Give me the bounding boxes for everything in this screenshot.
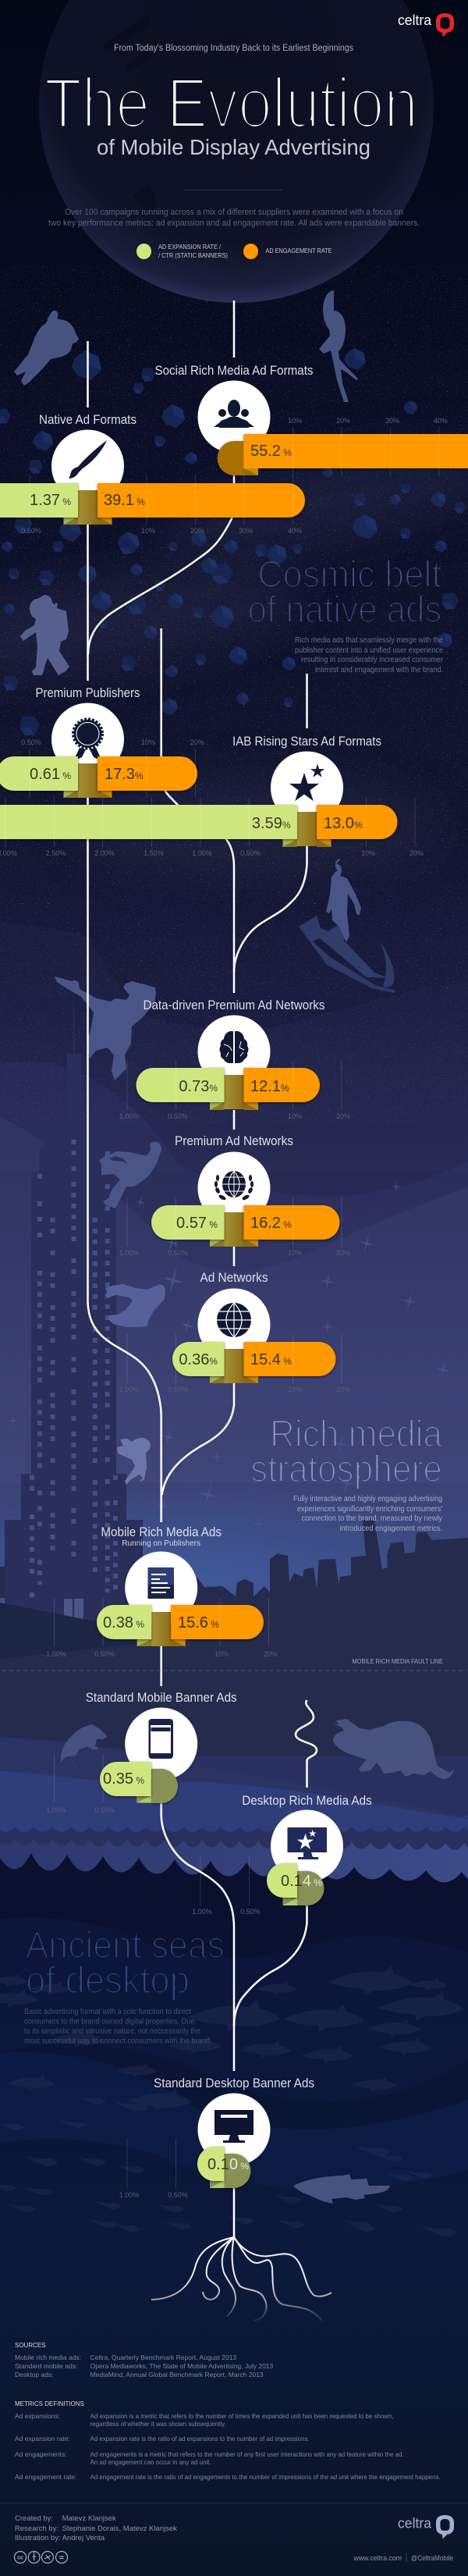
wave bands	[0, 1737, 468, 1884]
badge: Social Rich Media Ad Formats: 20%	[336, 417, 350, 425]
badge: Social Rich Media Ad Formats: Social Rich Media Ad Formats	[154, 364, 314, 378]
legend: AD EXPANSION RATE /	[158, 244, 222, 251]
badge: Mobile Rich Media Ads: 1.00%	[46, 1650, 66, 1658]
section: rich media stratosphere: experiences significantly enriching consumers'	[297, 1504, 442, 1514]
badge: Ad Networks: 15.4 %	[250, 1351, 292, 1368]
badge: Standard Mobile Banner Ads: Standard Mobile Banner Ads	[86, 1691, 237, 1705]
badge: Premium Ad Networks: 0.50%	[168, 1249, 188, 1257]
licence icons: cc	[17, 2556, 23, 2560]
section: rich media stratosphere: introduced engagement metrics.	[340, 1524, 442, 1533]
icon: globe	[217, 1303, 251, 1337]
credits: Created by:	[15, 2514, 53, 2523]
icon: monitor with banner	[214, 2110, 254, 2143]
section: cosmic belt of native ads: resulting in considerably increased consumer	[301, 655, 443, 664]
illustration: skyscraper	[5, 966, 143, 1641]
badge: Ad Networks	[119, 1271, 350, 1393]
illustration: flying astronaut	[14, 311, 79, 386]
icon: users	[214, 400, 254, 428]
badge: IAB Rising Stars Ad Formats: 2.50%	[46, 849, 66, 857]
badge: IAB Rising Stars Ad Formats: 10%	[361, 849, 375, 857]
badge: Standard Mobile Banner Ads	[46, 1691, 237, 1814]
metrics definitions: Ad engagement rate is the ratio of ad engagements to the number of impressions of the ad unit where the engagement happens.	[90, 2473, 441, 2481]
section: ancient seas of desktop: Ancient seas	[25, 1925, 225, 1966]
badge: Data-driven Premium Ad Networks: 20%	[336, 1112, 350, 1120]
badge: Ad Networks: 20%	[336, 1386, 350, 1393]
icon: brain	[220, 1031, 248, 1063]
badge: Standard Desktop Banner Ads	[119, 2076, 314, 2199]
sources: Standard mobile ads:	[15, 2362, 77, 2370]
badge: Native Ad Formats: 1.37 %	[30, 492, 71, 509]
title: The Evolution	[44, 65, 418, 143]
illustration: rat	[61, 1724, 108, 1772]
badge: IAB Rising Stars Ad Formats	[0, 735, 424, 857]
logo: celtra	[398, 12, 454, 37]
badge: Standard Mobile Banner Ads: 0.35 %	[103, 1770, 144, 1788]
badge: Standard Desktop Banner Ads: 1.00%	[119, 2191, 139, 2199]
badge: Premium Ad Networks: 0.57 %	[176, 1215, 218, 1232]
badge: Native Ad Formats: 30%	[239, 527, 253, 535]
trunk lines	[87, 301, 317, 2237]
section: ancient seas of desktop: to its simplistic and intrusive nature, not neccessarily the	[24, 2026, 200, 2036]
section: rich media stratosphere: Rich media	[270, 1414, 442, 1455]
foreground hill	[0, 1603, 179, 1659]
legend	[136, 244, 332, 259]
credits	[15, 2514, 177, 2542]
icon: stars	[289, 763, 324, 801]
section: cosmic belt of native ads: interest and engagement with the brand.	[315, 665, 443, 674]
illustration: triceratops	[333, 1719, 454, 1779]
logo: celtra: celtra	[398, 12, 432, 28]
section: ancient seas of desktop: consumers to the brand owned digital properties. Due	[24, 2017, 195, 2026]
sources	[15, 2342, 274, 2379]
badge: Native Ad Formats: 40%	[288, 527, 302, 535]
legend: AD ENGAGEMENT RATE	[265, 247, 332, 254]
metrics definitions: Ad expansion rate is the ratio of ad expansions to the number of ad impressions.	[90, 2435, 310, 2443]
icon: rosette	[73, 719, 103, 761]
badge: Mobile Rich Media Ads: 10%	[214, 1650, 229, 1658]
icon: document	[148, 1567, 174, 1599]
badge: Data-driven Premium Ad Networks: 12.1%	[250, 1078, 289, 1095]
badge: Native Ad Formats: 10%	[141, 527, 155, 535]
licence icons	[14, 2551, 67, 2564]
badge: Standard Desktop Banner Ads: Standard Desktop Banner Ads	[154, 2076, 314, 2090]
section: rich media stratosphere: stratosphere	[250, 1449, 442, 1490]
page background	[0, 0, 468, 1686]
badge: Standard Desktop Banner Ads: 0.10 %	[207, 2156, 249, 2173]
shoal of fish	[0, 1966, 464, 2236]
badge: Ad Networks: 10%	[288, 1386, 302, 1393]
badge: Premium Ad Networks: 16.2 %	[250, 1215, 292, 1232]
badge: Desktop Rich Media Ads: 0.50%	[240, 1908, 261, 1916]
badge: Data-driven Premium Ad Networks: 1.00%	[119, 1112, 139, 1120]
kicker line: From Today's Blossoming Industry Back to its Earliest Beginnings	[114, 44, 353, 53]
section: ancient seas of desktop	[24, 1925, 225, 2045]
badge: Mobile Rich Media Ads: 0.50%	[94, 1650, 115, 1658]
badge: Desktop Rich Media Ads	[192, 1794, 372, 1916]
section: cosmic belt of native ads	[248, 554, 443, 674]
badge: IAB Rising Stars Ad Formats: 13.0%	[324, 815, 363, 832]
sources: Desktop ads:	[15, 2371, 54, 2379]
section: cosmic belt of native ads: publisher content into a unified user experience	[295, 646, 443, 655]
badge: Data-driven Premium Ad Networks: 0.73%	[179, 1078, 218, 1095]
metrics definitions: An ad engagement can occur in any ad unit.	[90, 2458, 211, 2466]
section: cosmic belt of native ads: Rich media ads that seamlessly merge with the	[295, 635, 443, 645]
badge: Social Rich Media Ad Formats: 55.2 %	[250, 443, 292, 460]
badge: Data-driven Premium Ad Networks: 0.50%	[168, 1112, 188, 1120]
badge: Ad Networks: Ad Networks	[200, 1271, 268, 1285]
badge: Premium Publishers	[0, 686, 204, 798]
section: cosmic belt of native ads: Cosmic belt	[257, 554, 441, 596]
icon: monitor with stars	[287, 1827, 327, 1859]
sea	[0, 1795, 468, 2576]
badge: IAB Rising Stars Ad Formats: 20%	[410, 849, 424, 857]
badge: Social Rich Media Ad Formats: 10%	[288, 417, 302, 425]
asteroid belt	[0, 348, 466, 736]
badge: Ad Networks: 1.00%	[119, 1386, 139, 1393]
footer links: @CeltraMobile	[411, 2554, 453, 2563]
metrics definitions: Ad expansions:	[15, 2412, 60, 2420]
section: ancient seas of desktop: of desktop	[26, 1960, 190, 2001]
sources: MediaMind, Annual Global Benchmark Report, March 2013	[90, 2371, 264, 2379]
badge: Social Rich Media Ad Formats: 40%	[434, 417, 448, 425]
badge: Premium Publishers: 0.50%	[21, 738, 41, 746]
sources: Opera Mediaworks, The State of Mobile Advertising, July 2013	[90, 2362, 274, 2370]
metrics definitions: Ad engagements:	[15, 2450, 67, 2458]
illustration: alien	[319, 290, 358, 402]
icon: globe with laurel	[214, 1171, 254, 1201]
illustration: large fish	[293, 2174, 390, 2204]
badge: Data-driven Premium Ad Networks: 10%	[288, 1112, 302, 1120]
badge: Native Ad Formats: 20%	[190, 527, 204, 535]
badge: Native Ad Formats: Native Ad Formats	[39, 413, 136, 427]
credits: Research by:	[15, 2524, 58, 2533]
icon: paintbrush	[69, 440, 107, 479]
section: ancient seas of desktop: Basic advertising format with a sole function to direct	[24, 2007, 191, 2016]
badge: Standard Desktop Banner Ads: 0.50%	[168, 2191, 188, 2199]
footer logo: celtra	[398, 2515, 432, 2531]
badge: Data-driven Premium Ad Networks: Data-driven Premium Ad Networks	[144, 998, 324, 1012]
badge: Desktop Rich Media Ads: 1.00%	[192, 1908, 212, 1916]
fault line label: MOBILE RICH MEDIA FAULT LINE	[353, 1657, 443, 1665]
badge: Premium Publishers: Premium Publishers	[36, 686, 140, 700]
metrics definitions: Ad engagement rate:	[15, 2473, 76, 2481]
illustration: climbing strongman	[55, 977, 156, 1080]
section: rich media stratosphere: connection to the brand, measured by newly	[301, 1514, 443, 1523]
planet	[39, 0, 434, 303]
metrics definitions: regardless of whether it was shown subsequently.	[90, 2420, 226, 2428]
badge: IAB Rising Stars Ad Formats: 2.00%	[94, 849, 115, 857]
footer logo	[398, 2515, 454, 2539]
badge: IAB Rising Stars Ad Formats: IAB Rising Stars Ad Formats	[232, 735, 381, 749]
credits: Stephanie Dorais, Matevz Klanjsek	[62, 2524, 177, 2533]
badge: IAB Rising Stars Ad Formats: 1.00%	[192, 849, 212, 857]
badge: Mobile Rich Media Ads: 20%	[264, 1650, 278, 1658]
section: cosmic belt of native ads: of native ads	[248, 589, 441, 631]
credits: Illustration by:	[15, 2534, 61, 2542]
badge: Premium Ad Networks: 1.00%	[119, 1249, 139, 1257]
badge: Native Ad Formats: 39.1 %	[104, 492, 145, 509]
section: rich media stratosphere: Fully interactive and highly engaging advertising	[293, 1494, 442, 1503]
badge: Desktop Rich Media Ads: Desktop Rich Media Ads	[242, 1794, 372, 1808]
illustration: astronaut with backpack	[20, 595, 69, 675]
illustration: crouching climber	[105, 1284, 165, 1327]
badge: IAB Rising Stars Ad Formats: 3.59%	[252, 815, 291, 832]
badge: Ad Networks: 0.50%	[168, 1386, 188, 1393]
badge: Premium Publishers: 20%	[190, 738, 204, 746]
metrics definitions: METRICS DEFINITIONS	[15, 2400, 84, 2407]
badge: Standard Mobile Banner Ads: 0.50%	[94, 1806, 115, 1814]
illustration: man on shooting star	[299, 859, 395, 993]
sources: Mobile rich media ads:	[15, 2354, 81, 2361]
footer links	[353, 2553, 453, 2563]
sparkle stars	[8, 1180, 452, 1533]
illustration: climbing man	[99, 1142, 161, 1208]
metrics definitions: Ad expansion rate:	[15, 2435, 70, 2443]
badge: Native Ad Formats: 0.50%	[21, 527, 41, 535]
badge: Social Rich Media Ad Formats	[154, 364, 468, 475]
badge: Premium Ad Networks	[119, 1134, 350, 1257]
section: ancient seas of desktop: most successful way to connect consumers with the brand.	[24, 2036, 212, 2045]
skyline and ground	[0, 1520, 468, 1873]
credits: Andrej Venta	[62, 2534, 105, 2542]
badge: Mobile Rich Media Ads	[46, 1525, 278, 1658]
intro paragraph: two key performance metrics: ad expansion and ad engagement rate. All ads were expandable banners.	[48, 219, 420, 228]
badge: Standard Mobile Banner Ads: 1.00%	[46, 1806, 66, 1814]
section: rich media stratosphere	[250, 1414, 443, 1533]
sources: SOURCES	[15, 2342, 46, 2349]
badge: Premium Publishers: 0.61 %	[30, 766, 71, 783]
badge: Mobile Rich Media Ads: Running on Publishers	[122, 1539, 200, 1548]
intro paragraph: Over 100 campaigns running across a mix of different suppliers were examined with a focus on	[65, 208, 403, 217]
sea currents	[0, 1918, 468, 2190]
metrics definitions	[15, 2400, 441, 2481]
badge: Mobile Rich Media Ads: 0.38 %	[103, 1614, 144, 1631]
legend: / CTR (STATIC BANNERS)	[158, 252, 228, 259]
axis ticks	[292, 427, 440, 475]
title: of Mobile Display Advertising	[97, 135, 370, 159]
metrics definitions: Ad engagements is a metric that refers to the number of any first user interactions with any ad feature within the ad.	[90, 2450, 404, 2458]
footer links: www.celtra.com	[353, 2554, 402, 2563]
icon: phone	[148, 1719, 173, 1759]
intro paragraph	[48, 208, 420, 228]
fault line	[2, 1670, 468, 1671]
badge: IAB Rising Stars Ad Formats: 0.50%	[240, 849, 261, 857]
badge: Premium Ad Networks: 20%	[336, 1249, 350, 1257]
badge: Social Rich Media Ad Formats: 30%	[385, 417, 399, 425]
badge: Premium Publishers: 10%	[141, 738, 155, 746]
badge: Desktop Rich Media Ads: 0.14 %	[281, 1873, 322, 1890]
illustration: monkey	[117, 1438, 151, 1485]
metrics definitions: Ad expansion is a metric that refers to the number of times the expanded unit has been requested to be shown,	[90, 2412, 394, 2420]
badge: Mobile Rich Media Ads: Mobile Rich Media Ads	[101, 1525, 222, 1539]
badge: Ad Networks: 0.36%	[179, 1351, 218, 1368]
badge: Premium Ad Networks: Premium Ad Networks	[175, 1134, 293, 1148]
sources: Celtra, Quarterly Benchmark Report, August 2013	[90, 2354, 236, 2361]
badge: Native Ad Formats	[0, 413, 305, 535]
badge: Premium Publishers: 17.3%	[105, 766, 144, 783]
credits: Matevz Klanjsek	[62, 2514, 116, 2523]
badge: IAB Rising Stars Ad Formats: 1.50%	[144, 849, 164, 857]
badge: Mobile Rich Media Ads: 15.6 %	[178, 1614, 219, 1631]
roots	[151, 2237, 332, 2321]
badge: Data-driven Premium Ad Networks	[119, 998, 350, 1120]
badge: Premium Ad Networks: 10%	[288, 1249, 302, 1257]
